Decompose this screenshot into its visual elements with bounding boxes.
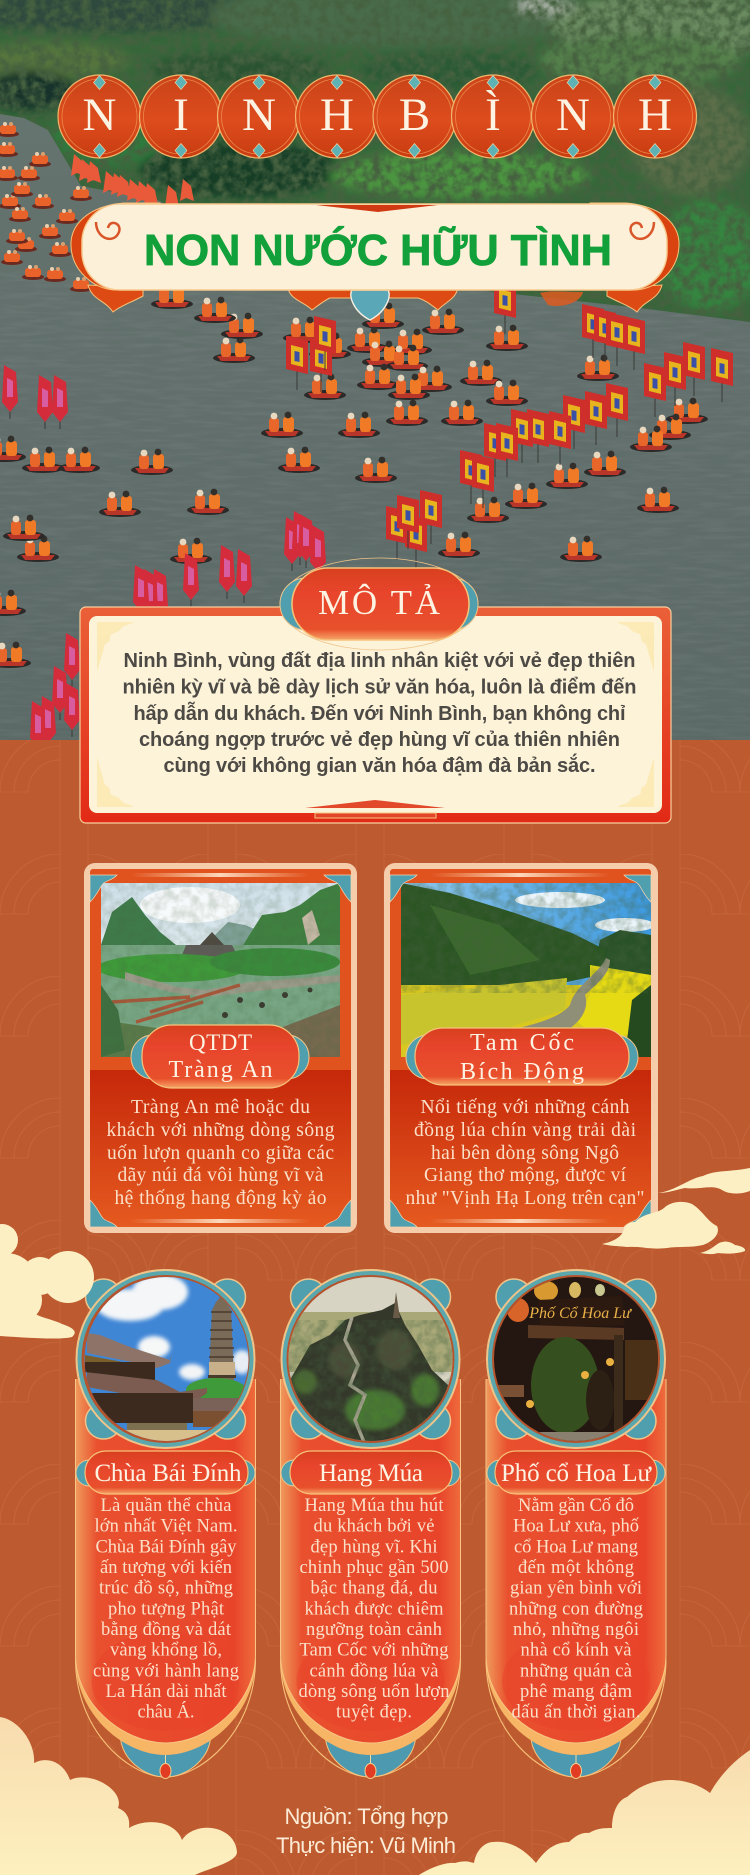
flags: [2, 154, 733, 755]
body text: hai bên dòng sông Ngô: [431, 1143, 619, 1164]
letter B: [373, 75, 456, 158]
body text: những con đường: [509, 1599, 643, 1619]
banner ornaments below: [88, 285, 662, 320]
body text: ấn tượng với kiến: [100, 1558, 232, 1578]
body text: pho tượng Phật: [108, 1599, 225, 1619]
body text: cánh đồng lúa và: [310, 1661, 438, 1681]
letter N: N: [242, 89, 276, 141]
cloud: upper left: [0, 1224, 94, 1339]
body text: khách được chiêm: [304, 1599, 444, 1619]
bottom notch: [305, 800, 445, 818]
column: Phố cổ Hoa Lư: [486, 1270, 666, 1778]
card: Tràng An: [84, 863, 357, 1233]
corner ornaments: [90, 875, 351, 1227]
body text: cổ Hoa Lư mang: [514, 1537, 638, 1557]
body text: [509, 1496, 643, 1723]
label: Phố cổ Hoa Lư: [501, 1460, 652, 1487]
boats: [0, 122, 708, 668]
body text: nhà cổ kính và: [520, 1641, 632, 1661]
body text: [106, 1097, 335, 1209]
description text: cùng với không gian văn hóa đậm đà bản sắc.: [164, 753, 596, 777]
card: Tam Cốc Bích Động: [384, 863, 658, 1233]
body text: uốn lượn quanh co giữa các: [107, 1143, 334, 1164]
body text: gian yên bình với: [510, 1579, 642, 1599]
label: QTDT Tràng An: [131, 1025, 309, 1088]
letter H: [614, 75, 696, 158]
body text: bậc thang đá, du: [310, 1579, 438, 1599]
photo: Hang Múa peak: [288, 1277, 453, 1442]
label: Hang Múa: [319, 1460, 423, 1487]
body text: Tam Cốc với những: [300, 1641, 448, 1661]
letter B: B: [399, 89, 430, 141]
body text: vàng khổng lồ,: [110, 1641, 222, 1661]
letter Ì: [452, 75, 534, 158]
label: Tam Cốc Bích Động: Bích Động: [460, 1059, 584, 1085]
cloud: bottom right: [419, 1750, 750, 1875]
description text: nhiên kỳ vĩ và bề dày lịch sử văn hóa, luôn là điểm đến: [122, 676, 636, 698]
footer credits: [276, 1804, 456, 1858]
cloud: upper right: [602, 1168, 750, 1254]
body text: [406, 1097, 644, 1209]
panel frame: [80, 607, 671, 823]
label: QTDT Tràng An: QTDT: [189, 1030, 252, 1055]
body text: đồng lúa chín vàng trải dài: [414, 1120, 637, 1141]
photo: Hoa Lư old quarter: [494, 1277, 659, 1442]
body text: dãy núi đá vôi hùng vĩ và: [118, 1165, 324, 1186]
body text: đến một không: [518, 1558, 634, 1578]
letter N: [532, 75, 614, 158]
body text: [93, 1496, 239, 1723]
body text: Hang Múa thu hút: [304, 1496, 444, 1516]
letter Ì: Ì: [485, 89, 501, 141]
body text: khách với những dòng sông: [106, 1120, 335, 1141]
body text: Tràng An mê hoặc du: [131, 1097, 310, 1118]
body text: dấu ấn thời gian.: [512, 1703, 640, 1723]
banner heading: NON NƯỚC HỮU TÌNH: [144, 225, 612, 275]
body text: bằng đồng và dát: [101, 1620, 232, 1640]
body text: Giang thơ mộng, được ví: [424, 1165, 627, 1186]
label: Tam Cốc Bích Động: Tam Cốc: [470, 1030, 574, 1056]
body text: trúc đồ sộ, những: [99, 1579, 233, 1599]
label: Chùa Bái Đính: [94, 1460, 242, 1487]
body text: tuyệt đẹp.: [336, 1703, 412, 1723]
photo: Bái Đính pagoda: [84, 1274, 252, 1442]
body text: chinh phục gần 500: [300, 1558, 448, 1578]
body text: hệ thống hang động kỳ ảo: [114, 1188, 326, 1209]
letter N: N: [83, 89, 116, 141]
body text: Nằm gần Cố đô: [518, 1496, 634, 1516]
body text: đẹp hùng vĩ. Khi: [310, 1537, 438, 1557]
corner ornaments: [390, 875, 651, 1227]
label: [487, 1451, 665, 1494]
body text: châu Á.: [138, 1701, 194, 1723]
description text: choáng ngợp trước vẻ đẹp hùng vĩ của thiên nhiên: [139, 729, 620, 751]
label: QTDT Tràng An: Tràng An: [168, 1057, 272, 1083]
body text: nhỏ, những ngôi: [513, 1620, 639, 1640]
body text: La Hán dài nhất: [106, 1682, 227, 1702]
description text: [122, 650, 636, 777]
body text: như "Vịnh Hạ Long trên cạn": [406, 1188, 644, 1209]
footer credits: Nguồn: Tổng hợp: [284, 1804, 448, 1829]
body text: cùng với hành lang: [93, 1661, 239, 1681]
photo: Tràng An landscape: [97, 883, 340, 1059]
body text: [298, 1496, 450, 1723]
panel cream body: [89, 616, 662, 813]
corner ornaments: [97, 622, 654, 807]
letter I: [140, 75, 222, 158]
body text: Hoa Lư xưa, phố: [513, 1517, 639, 1537]
body text: Chùa Bái Đính gây: [96, 1537, 237, 1557]
letter H: H: [320, 89, 354, 141]
body text: du khách bởi vẻ: [314, 1517, 434, 1537]
body text: dòng sông uốn lượn: [298, 1682, 450, 1702]
photo: Hoa Lư old quarter: Phố Cổ Hoa Lư: [528, 1305, 632, 1322]
body text: phê mang đậm: [520, 1682, 633, 1702]
body text: ngưỡng toàn cảnh: [306, 1620, 442, 1640]
letter N: [218, 75, 300, 158]
label: [281, 1451, 460, 1494]
description text: hấp dẫn du khách. Đến với Ninh Bình, bạn không chỉ: [134, 701, 626, 725]
badge: MÔ TẢ: [280, 558, 478, 650]
body text: Là quần thể chùa: [100, 1496, 232, 1516]
footer credits: Thực hiện: Vũ Minh: [276, 1833, 456, 1858]
label: Tam Cốc Bích Động: [406, 1028, 638, 1085]
subtitle banner: Non nước hữu tình: [71, 203, 679, 320]
letter N: N: [556, 89, 590, 141]
photo: Tam Cốc rice fields: [401, 883, 655, 1057]
hero photo: river boat festival: [0, 0, 750, 755]
panel: description: [80, 558, 671, 823]
body text: Nổi tiếng với những cánh: [420, 1097, 630, 1118]
description text: Ninh Bình, vùng đất địa linh nhân kiệt với vẻ đẹp thiên: [124, 650, 636, 672]
letter H: [296, 75, 378, 158]
badge: MÔ TẢ: MÔ TẢ: [318, 582, 441, 622]
column: Hang Múa: [280, 1270, 460, 1778]
letter H: H: [638, 89, 672, 141]
body text: lớn nhất Việt Nam.: [94, 1517, 238, 1537]
column: Chùa Bái Đính: [76, 1270, 256, 1778]
letter N: [58, 75, 141, 158]
body text: những quán cà: [520, 1661, 632, 1681]
letter I: I: [173, 89, 189, 141]
cloud: bottom left: [0, 1717, 237, 1875]
label: [76, 1451, 255, 1494]
title: NINH BÌNH medallions: [58, 75, 696, 158]
